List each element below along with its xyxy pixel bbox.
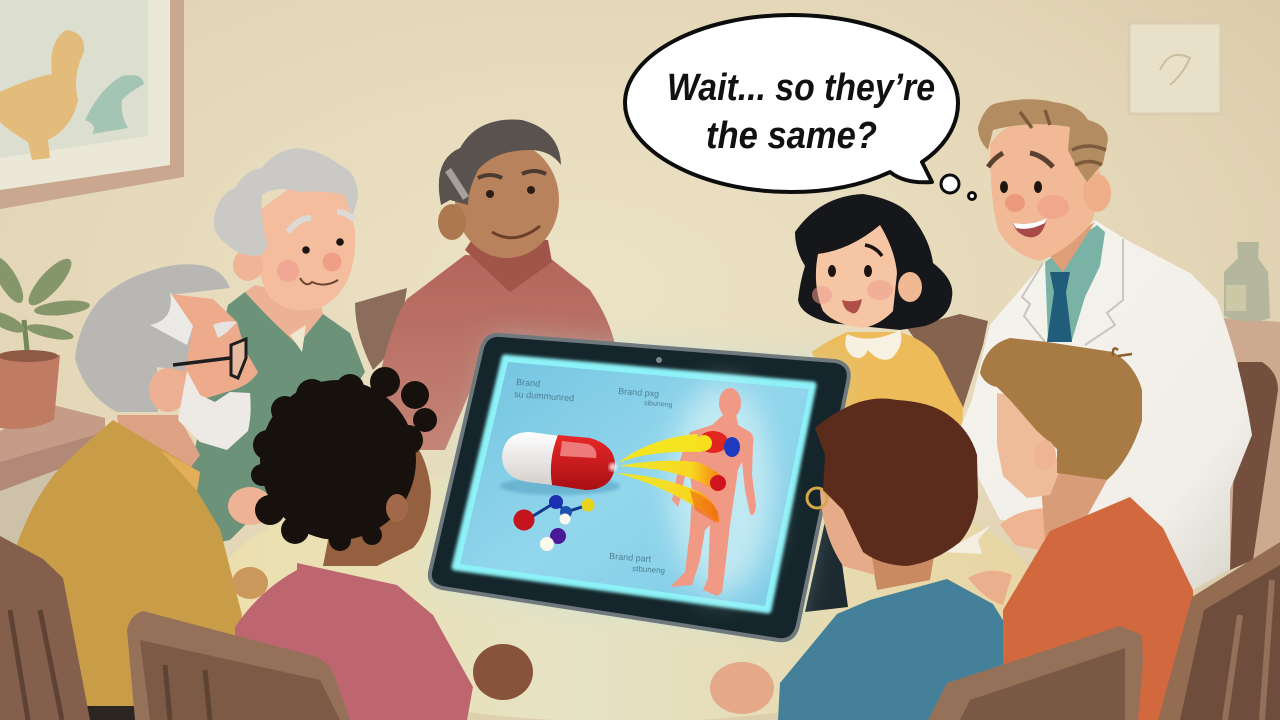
hair (978, 99, 1108, 182)
head skin (323, 430, 431, 566)
body halo (670, 385, 774, 595)
features (486, 190, 494, 198)
collar (845, 330, 901, 360)
neck (1040, 470, 1107, 540)
side table, left (0, 405, 105, 491)
screen labels (514, 377, 673, 575)
white coat (957, 220, 1252, 590)
maroon shirt (375, 255, 615, 450)
hand (473, 644, 533, 700)
shelf and bottle, right (1223, 242, 1280, 562)
hair cowlick (1113, 348, 1132, 356)
doctor hand (1000, 508, 1058, 550)
neck (1045, 222, 1095, 272)
paper on table (943, 526, 990, 554)
person: man in maroon shirt (375, 120, 615, 450)
chair, bottom left corner (0, 536, 90, 720)
face (988, 153, 1069, 237)
ear (386, 494, 408, 522)
painting shapes (0, 30, 144, 160)
screen labels: Brand part (609, 551, 652, 564)
bubble text (667, 67, 935, 157)
head (256, 188, 355, 310)
camera (656, 357, 662, 363)
molecule (514, 495, 594, 551)
screen (460, 362, 809, 606)
speech bubble (625, 15, 958, 192)
hair (439, 120, 561, 205)
human body figure (670, 388, 756, 596)
neck (870, 550, 935, 590)
green shirt (190, 292, 365, 545)
tablet (430, 335, 849, 640)
hair back (795, 194, 952, 330)
person: elderly man in green shirt (190, 148, 365, 545)
floor area, lower left (0, 450, 105, 560)
yellow dress (812, 332, 963, 470)
chair, bottom right corner (1158, 542, 1280, 720)
person: child with curly black hair (235, 367, 533, 720)
screen labels: stbuneng (632, 564, 665, 575)
tie (1047, 272, 1072, 342)
framed picture, right wall (1129, 23, 1221, 114)
screen labels: sibuneng (644, 400, 673, 409)
drug rays to the body (616, 434, 722, 523)
bezel (430, 335, 849, 640)
hair (75, 264, 230, 412)
tablet stand (805, 490, 848, 612)
screen glow edge (455, 358, 813, 610)
hair (214, 148, 358, 256)
head (455, 142, 559, 258)
screen labels: su dummunred (514, 389, 574, 403)
organs (696, 431, 740, 491)
hand (228, 487, 272, 525)
plant in pot (0, 253, 91, 429)
screen labels: Brand pxg (618, 386, 659, 399)
mustard shirt (17, 420, 242, 706)
teal shirt (1045, 225, 1105, 340)
capsule pill (500, 432, 620, 495)
face (997, 393, 1060, 498)
features (302, 246, 310, 254)
neck (117, 415, 200, 475)
hand (710, 662, 774, 714)
person: doctor in white coat (957, 99, 1252, 590)
orange shirt (1003, 497, 1197, 720)
head (990, 118, 1100, 261)
glow (430, 335, 847, 638)
thought dots (941, 175, 976, 200)
chair, foreground left (127, 611, 350, 720)
person: blond child in orange shirt (968, 338, 1197, 720)
chair backs, background (355, 288, 1278, 570)
chair, foreground centre right (928, 626, 1143, 720)
bubble text: Wait... so they’re (667, 67, 935, 109)
hand (968, 571, 1012, 605)
face (820, 490, 875, 575)
curly hair (251, 367, 437, 551)
person: girl in yellow (795, 194, 963, 470)
ear (1034, 440, 1056, 470)
person: child with brown hair and glasses (710, 399, 1020, 720)
round table (215, 462, 1035, 720)
bubble text: the same? (706, 115, 877, 157)
hair (980, 338, 1142, 480)
glasses (173, 358, 230, 365)
dark trousers (85, 700, 145, 720)
pink shirt (235, 563, 473, 720)
blue shirt (778, 579, 1020, 720)
coat lapels (1022, 239, 1123, 345)
glasses (807, 488, 827, 508)
person: bearded elderly man, foreground left (17, 264, 268, 720)
framed painting, left wall (0, 0, 184, 209)
face (170, 294, 258, 400)
features (828, 265, 836, 277)
beard (178, 371, 251, 450)
hair (815, 399, 978, 566)
face (816, 225, 897, 328)
screen labels: Brand (516, 377, 541, 389)
hand (232, 567, 268, 599)
